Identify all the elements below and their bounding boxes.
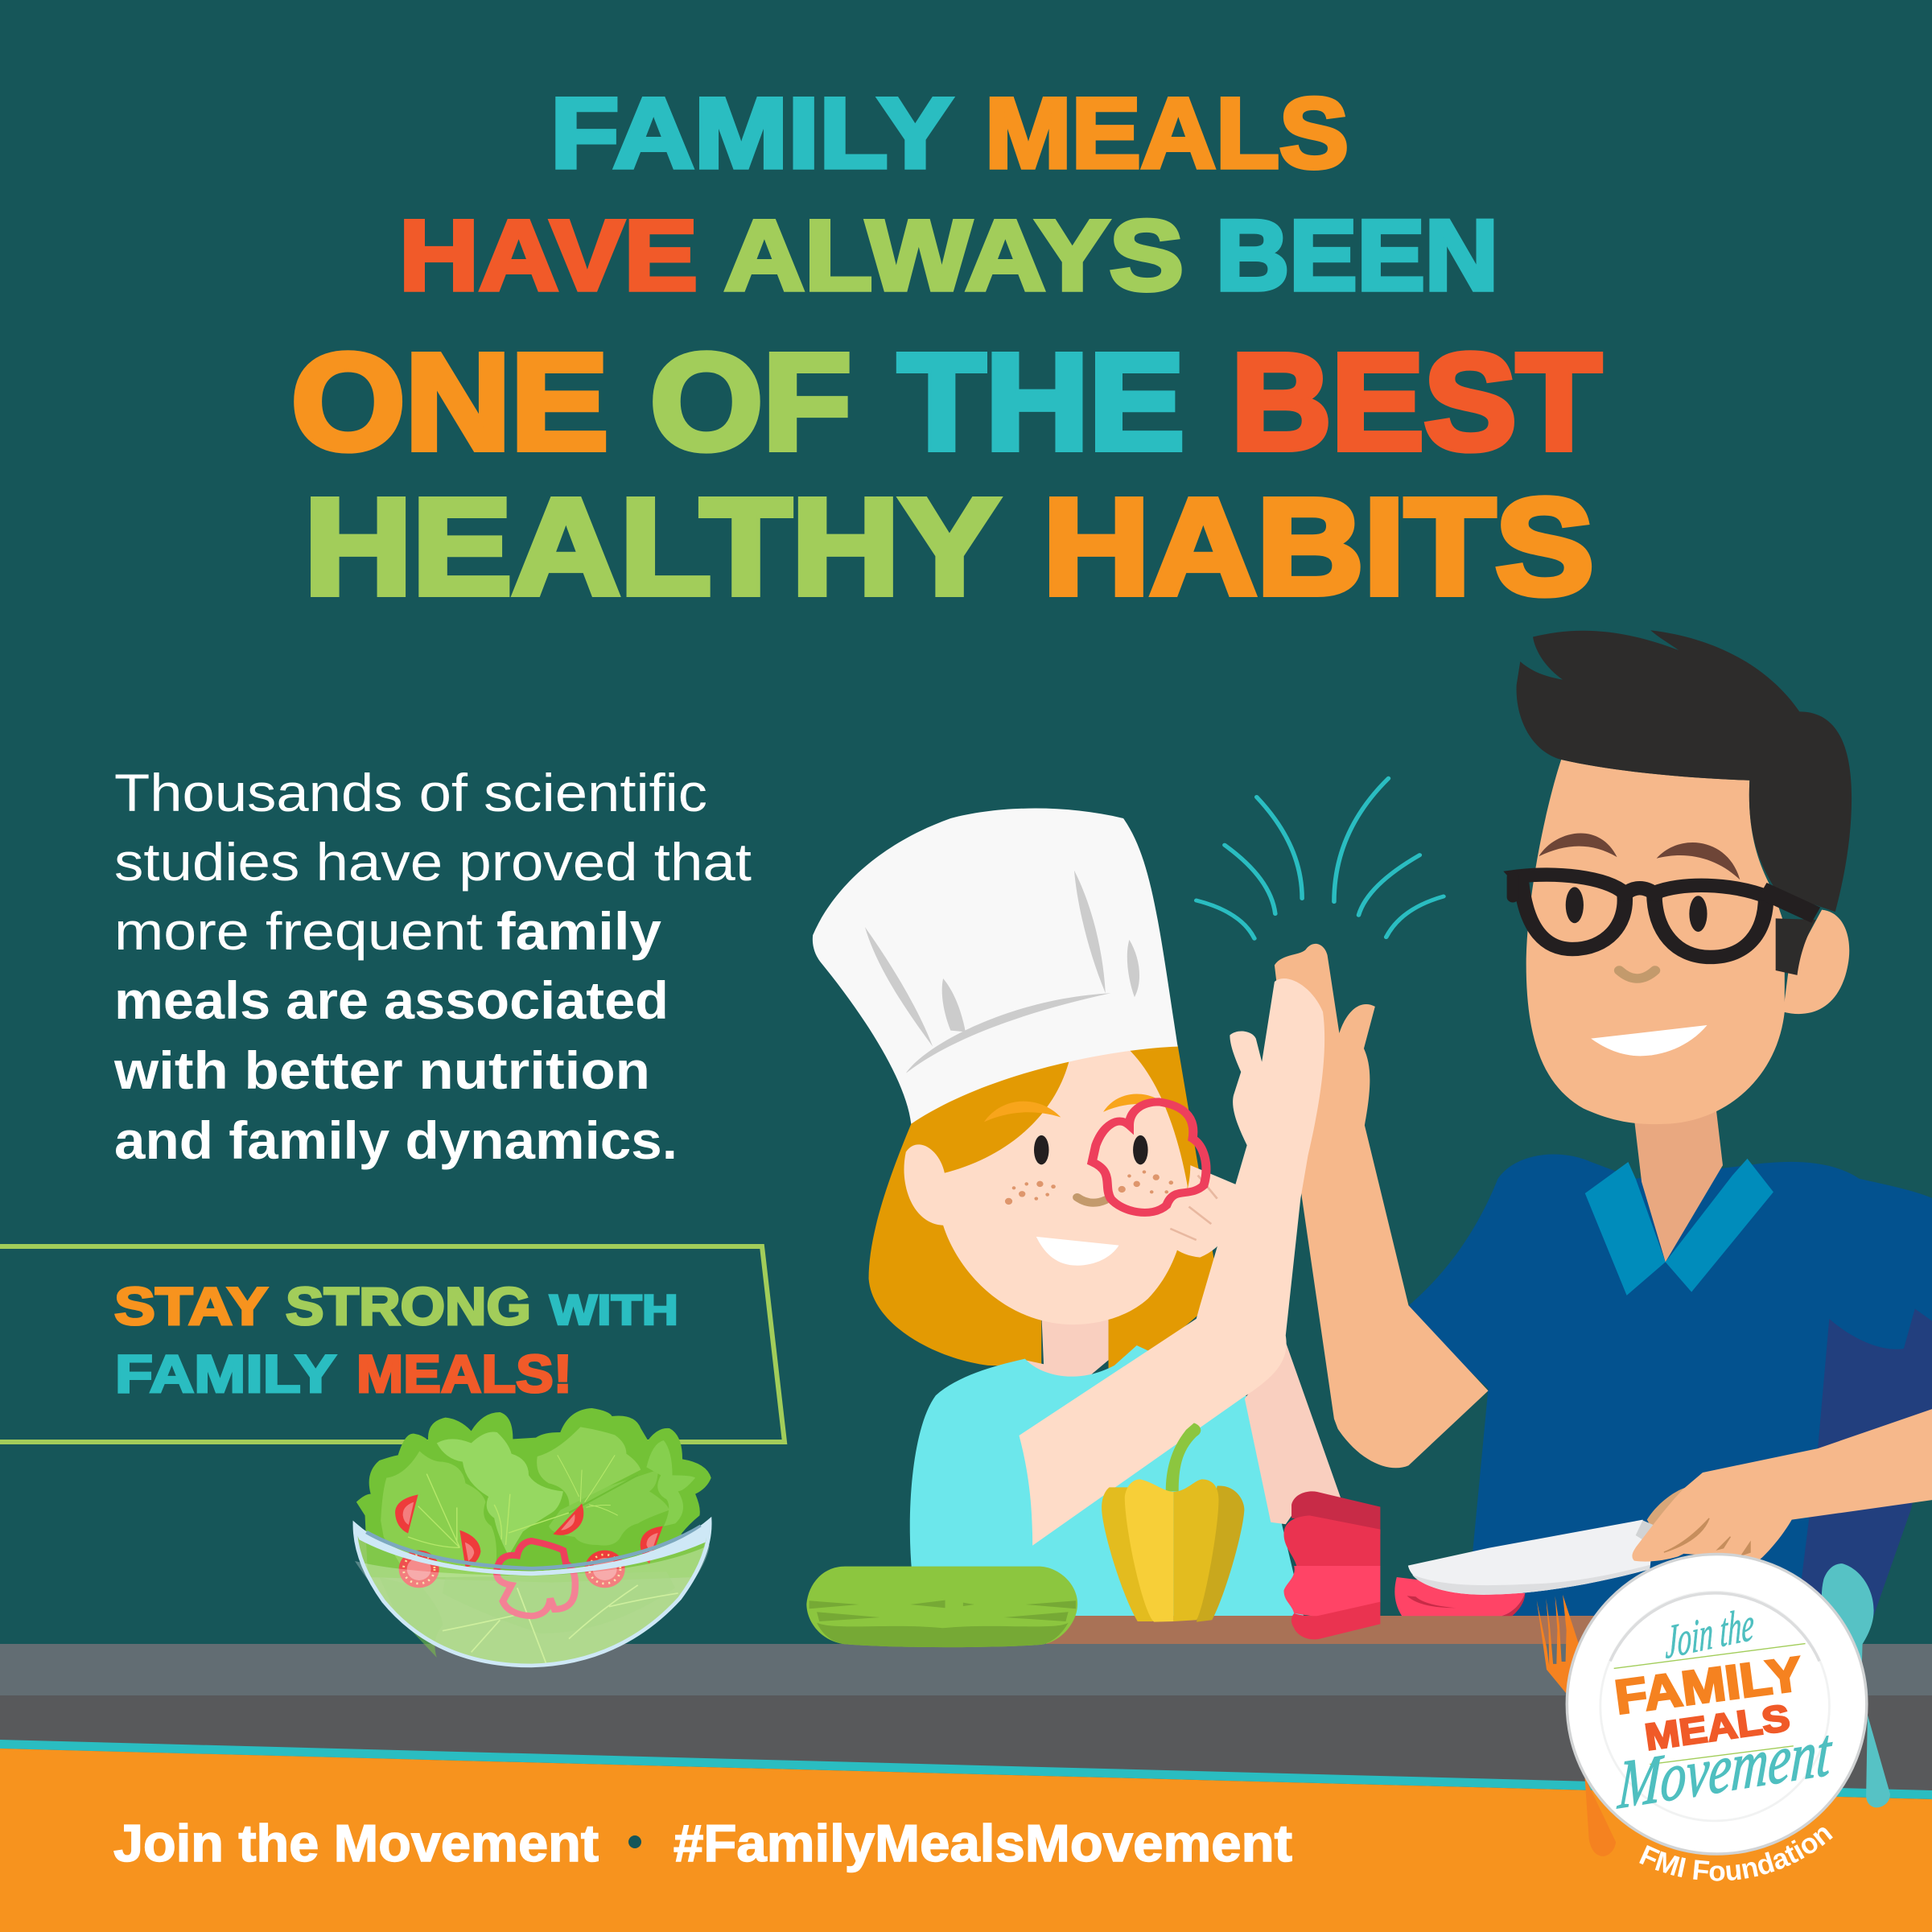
callout box: stay strong: WITH (550, 1287, 678, 1334)
man's eyebrows (1539, 834, 1740, 879)
finger shadows (1664, 1518, 1750, 1555)
lettuce leaf centre (437, 1431, 563, 1555)
cut red pepper (1283, 1491, 1380, 1639)
join the: Join the (1666, 1597, 1754, 1669)
body paragraph: meals are associated (114, 970, 669, 1030)
logo divider lines (1614, 1644, 1806, 1765)
man's cutting arm, knife and cutlery (1408, 1409, 1932, 1856)
footer bullet (628, 1835, 641, 1848)
family: FAMILY (1612, 1646, 1805, 1724)
man's shirt shadow (1796, 1308, 1932, 1625)
illustration: man and girl high-five (813, 630, 1932, 1639)
cutting board (1046, 1616, 1625, 1645)
girl's other arm (1245, 1342, 1341, 1524)
title: HAVE (399, 200, 698, 311)
plate inner ring (1600, 1592, 1829, 1821)
bowl back rim (366, 1526, 701, 1568)
back fingers (1647, 1487, 1687, 1539)
title (291, 78, 1601, 624)
body paragraph (113, 763, 752, 1170)
man's collar (1585, 1159, 1773, 1296)
fmi foundation curved text (1637, 1834, 1837, 1881)
lettuce veins (408, 1455, 678, 1663)
man's nose (1619, 970, 1655, 978)
tomato wedges (395, 1494, 663, 1588)
girl's back hair (869, 1035, 1215, 1369)
title: OF (650, 326, 851, 479)
lettuce leaf lower right (549, 1470, 669, 1546)
girl's ear (904, 1144, 945, 1226)
man's ear (1783, 910, 1849, 1014)
body paragraph: Thousands of scientific (114, 763, 707, 822)
yellow pepper (1102, 1423, 1244, 1622)
girl's shirt (910, 1345, 1304, 1619)
lettuce leaf right (537, 1427, 641, 1510)
girl's eyebrows (984, 1094, 1170, 1122)
body paragraph: family (496, 901, 661, 961)
cucumber (806, 1567, 1077, 1647)
girl's raised arm (1019, 978, 1324, 1546)
red pepper ring in bowl (496, 1541, 575, 1616)
man's eyes (1566, 887, 1707, 932)
red pepper slice under knife (1394, 1577, 1525, 1616)
man's smile (1591, 1025, 1707, 1056)
title: ONE (291, 326, 608, 479)
girl's freckles (1005, 1170, 1173, 1205)
girl's hand holding pepper (1159, 1165, 1241, 1258)
chef hat (813, 809, 1178, 1124)
title: FAMILY (550, 78, 953, 189)
callout box: stay strong: STRONG (286, 1276, 531, 1336)
movement: Movement (1616, 1713, 1834, 1823)
slice shading (1407, 1593, 1525, 1616)
girl's face (943, 1048, 1188, 1324)
forearm and hand (1632, 1409, 1932, 1562)
counter lower fill (0, 1738, 1932, 1794)
lettuce in bowl, darker folds (379, 1572, 675, 1658)
spoon (1822, 1563, 1890, 1807)
glass bowl (355, 1545, 710, 1666)
callout box: stay strong: STAY (114, 1276, 268, 1336)
meals: MEALS (1642, 1696, 1792, 1758)
footer text: Join the Movement (113, 1814, 599, 1872)
bowl interior greens (355, 1521, 710, 1666)
lettuce leaf left (381, 1451, 496, 1577)
footer band and counter (0, 1616, 1932, 1932)
salad bowl (353, 1408, 711, 1666)
title: THE (898, 326, 1184, 479)
body paragraph: more frequent (114, 901, 483, 961)
man's neck (1634, 1109, 1723, 1262)
plate inner ring shadow (1610, 1593, 1819, 1661)
girl's nose (1077, 1197, 1106, 1203)
man's shirt (1405, 1155, 1932, 1639)
bowl front rim (353, 1519, 711, 1576)
knife (1408, 1520, 1654, 1595)
plate (1567, 1555, 1867, 1854)
girl's smile (1036, 1237, 1118, 1266)
counter top (0, 1644, 1932, 1695)
fork (1537, 1595, 1616, 1856)
callout box: stay strong: FAMILY (115, 1344, 336, 1403)
man's hair (1517, 630, 1852, 912)
counter front (0, 1695, 1932, 1760)
title: HABITS (1043, 471, 1594, 624)
title: ALWAYS (724, 200, 1184, 311)
red pepper ring (1092, 1102, 1206, 1213)
motion lines (1197, 778, 1444, 938)
orange band (0, 1749, 1932, 1932)
body paragraph: and family dynamics. (114, 1110, 678, 1170)
title: BEEN (1216, 200, 1498, 311)
lettuce leaf far right (646, 1440, 695, 1526)
callout box: stay strong: MEALS! (356, 1344, 572, 1403)
callout box: stay strong (0, 1246, 785, 1442)
vegetables on the board (806, 1423, 1525, 1647)
body paragraph: with better nutrition (113, 1040, 650, 1100)
man's face (1526, 760, 1785, 1124)
body paragraph: studies have proved that (114, 832, 752, 892)
title: MEALS (985, 78, 1349, 189)
man's raised arm (1275, 944, 1488, 1468)
girl's neck (1025, 1312, 1109, 1380)
title: BEST (1231, 326, 1601, 479)
teal stripe (0, 1740, 1932, 1799)
girl's eyes (1034, 1135, 1148, 1164)
man's glasses (1513, 875, 1816, 957)
title: HEALTHY (304, 471, 999, 624)
footer text (113, 1814, 1292, 1872)
footer text: #FamilyMealsMovement (674, 1814, 1292, 1872)
man's sideburn (1776, 918, 1816, 975)
lettuce silhouette (356, 1408, 711, 1583)
plate logo (1566, 1553, 1868, 1881)
foundation label: FMI Foundation (1639, 1827, 1833, 1881)
